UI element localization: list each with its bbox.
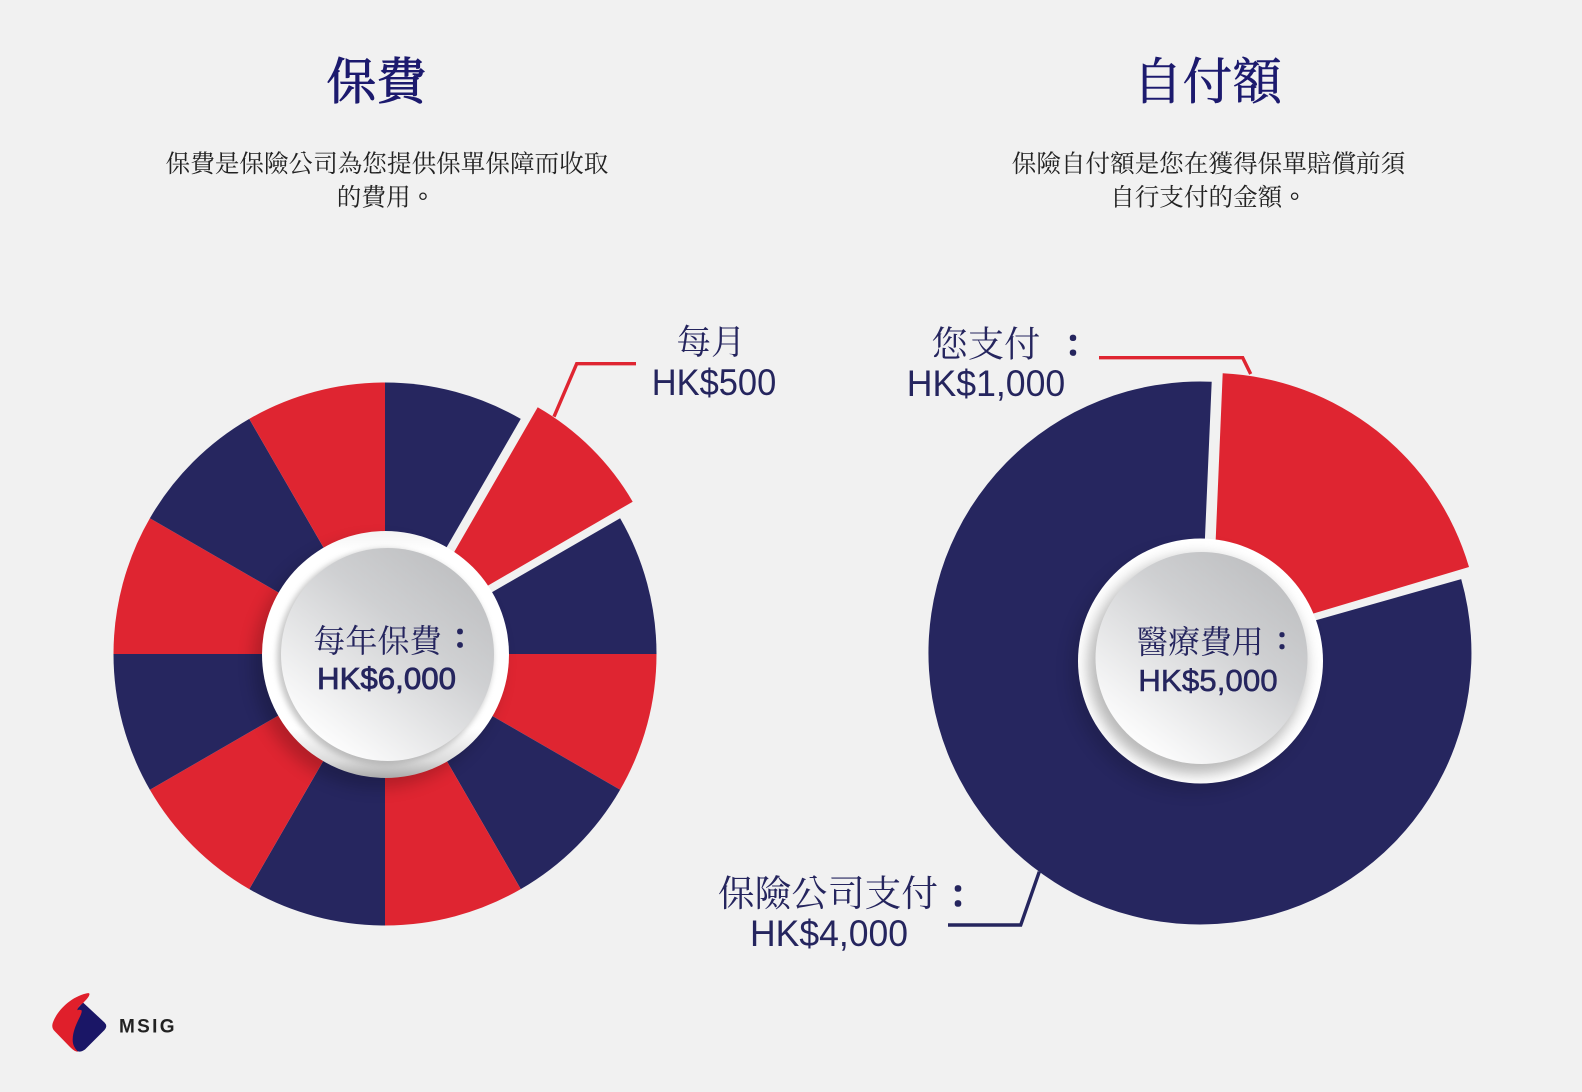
leader line: you pay: [1099, 358, 1251, 374]
label: insurer pays: 保險公司支付: [718, 865, 938, 917]
exploded slice: you pay: [1211, 373, 1469, 644]
slice: insurer pays: [928, 381, 1471, 924]
label: monthly amount: HK$500: [652, 361, 776, 403]
center badge: medical expenses: ：: [1270, 621, 1294, 656]
center badge: medical expenses: 醫療費用: [1136, 617, 1264, 663]
center badge: annual premium: HK$6,000: [317, 661, 456, 696]
center badge: annual premium: ：: [446, 618, 474, 656]
label: you pay: [907, 316, 1088, 404]
leader line: monthly: [554, 364, 636, 417]
center badge: medical expenses: [1070, 538, 1323, 792]
leader line: insurer pays: [948, 872, 1039, 925]
center badge: annual premium: [253, 531, 509, 788]
center badge: annual premium: 每年保費: [313, 616, 443, 662]
text: premium description: 保費是保險公司為您提供保單保障而收取: [166, 145, 608, 180]
exploded slice: one month: [408, 407, 633, 632]
icon: MSIG mark: [52, 993, 106, 1052]
label: you pay: HK$1,000: [907, 362, 1065, 404]
label: monthly amount: [652, 314, 776, 403]
center badge: medical expenses: HK$5,000: [1138, 663, 1278, 698]
label: insurer pays: ：: [942, 871, 974, 916]
chart: deductible pie: [928, 373, 1471, 924]
text: deductible description: 保險自付額是您在獲得保單賠償前須: [1012, 145, 1406, 180]
title: deductible: 自付額: [1133, 42, 1283, 114]
text: premium description: [166, 145, 608, 214]
label: you pay: ：: [1058, 322, 1088, 366]
label: insurer pays: HK$4,000: [750, 912, 908, 954]
title: premium: 保費: [326, 42, 428, 114]
label: insurer pays: [718, 865, 974, 954]
text: MSIG: MSIG: [119, 1017, 174, 1038]
label: you pay: 您支付: [932, 316, 1040, 368]
text: deductible description: [1012, 145, 1406, 214]
label: monthly amount: 每月: [676, 314, 746, 364]
chart: premium pie with 12 monthly slices: [114, 382, 656, 926]
text: premium description: 的費用。: [337, 178, 435, 214]
logo: MSIG: [52, 993, 174, 1052]
text: deductible description: 自行支付的金額。: [1110, 178, 1307, 214]
